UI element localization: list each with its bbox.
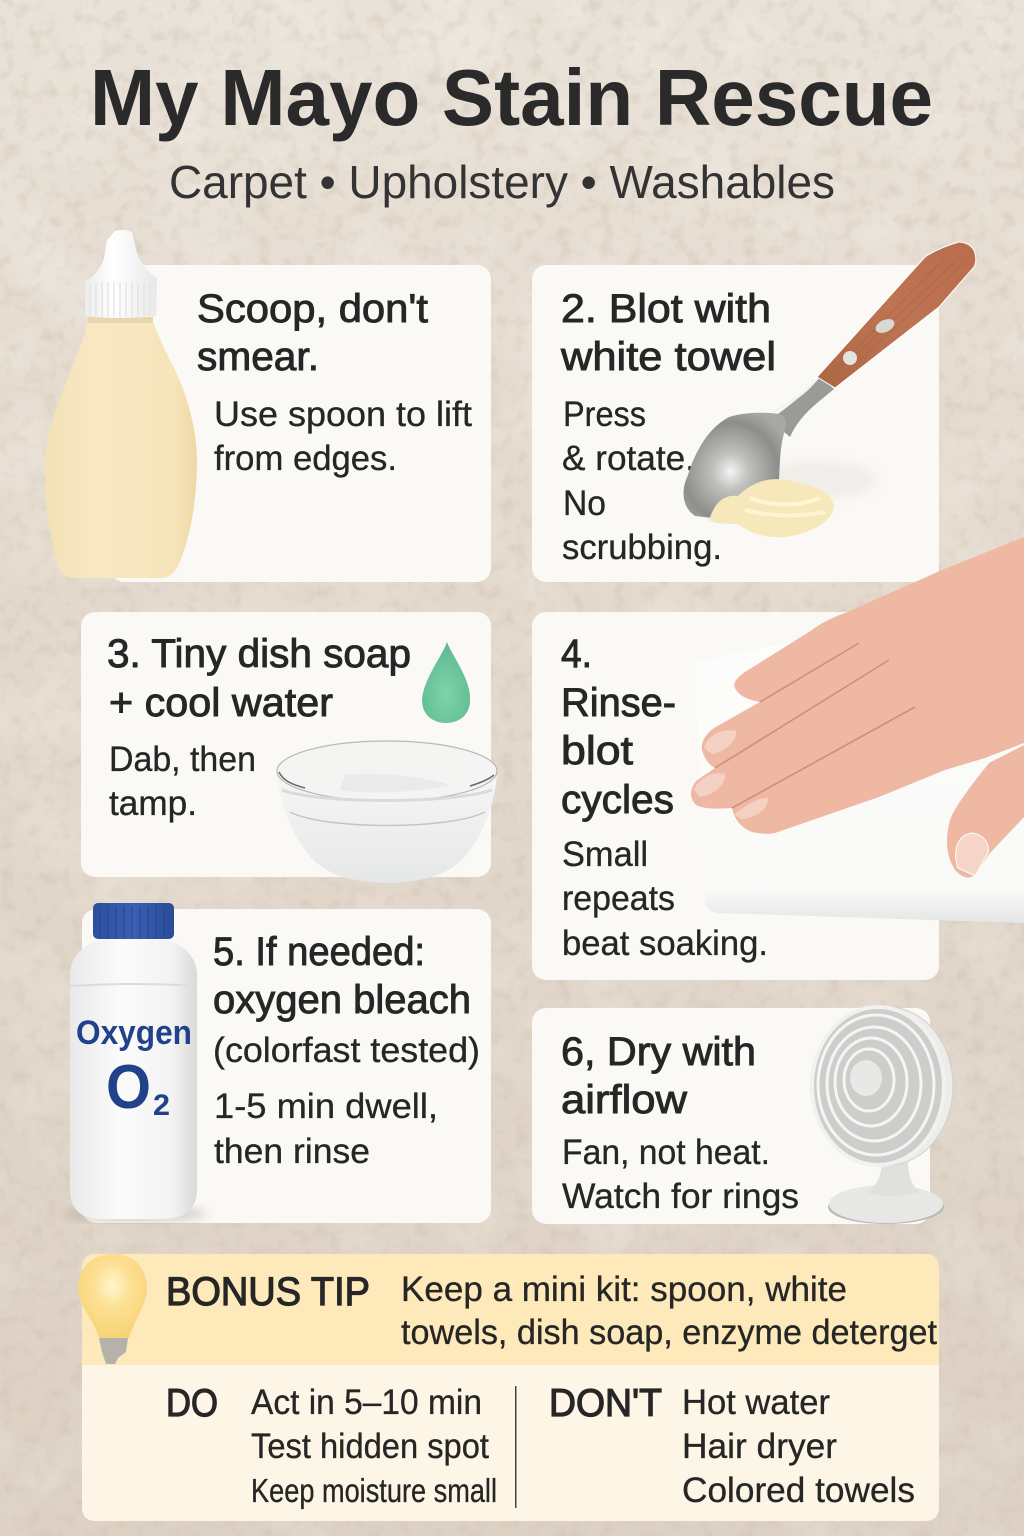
step 1 body: from edges.	[214, 439, 397, 478]
step 5 body: 1-5 min dwell,	[214, 1087, 438, 1126]
subtitle: Carpet • Upholstery • Washables	[169, 156, 835, 208]
step 1 heading	[197, 287, 428, 379]
oxygen label: Oxygen	[76, 1014, 192, 1052]
don't list: Hot water	[682, 1383, 830, 1422]
bonus tip text: towels, dish soap, enzyme deterget	[401, 1313, 937, 1352]
step 3 body: tamp.	[109, 784, 197, 823]
panel: step 2 blot	[532, 265, 939, 582]
O2 label: 2	[153, 1089, 170, 1122]
panel: bonus tip and do/don't	[82, 1254, 939, 1521]
step 4 body: repeats	[562, 879, 675, 918]
step 4 body	[562, 835, 768, 963]
bonus tip heading: BONUS TIP	[166, 1270, 370, 1314]
step 2 body: & rotate.	[562, 439, 695, 478]
step 5 body	[213, 1031, 480, 1171]
step 6 heading: airflow	[561, 1078, 687, 1122]
O2 label: O	[106, 1053, 151, 1122]
step 1 heading: Scoop, don't	[197, 287, 428, 331]
step 4 heading: blot	[561, 729, 633, 773]
step 6 body: Fan, not heat.	[562, 1133, 770, 1172]
don't heading: DON'T	[549, 1382, 662, 1425]
icon: oxygen bleach bottle	[63, 903, 207, 1220]
bonus tip text	[401, 1270, 937, 1352]
step 4 heading	[561, 632, 676, 822]
icon: spoon with mayo	[684, 242, 976, 537]
step 2 body: scrubbing.	[562, 528, 722, 567]
do and don't band	[82, 1365, 939, 1521]
step 3 heading: + cool water	[109, 681, 333, 725]
don't list: Colored towels	[682, 1471, 915, 1510]
do list: Act in 5–10 min	[251, 1383, 482, 1422]
don't list: Hair dryer	[682, 1427, 837, 1466]
step 4 heading: 4.	[561, 632, 592, 676]
step 6 body	[562, 1133, 799, 1216]
bonus tip band	[82, 1254, 939, 1365]
step 5 heading	[213, 930, 471, 1022]
step 2 heading: white towel	[560, 335, 776, 379]
panel: step 4 rinse	[532, 612, 939, 980]
step 2 heading: 2. Blot with	[561, 287, 771, 331]
step 1 body: Use spoon to lift	[214, 395, 472, 434]
step 3 heading	[107, 632, 411, 725]
step 2 body: Press	[563, 395, 646, 434]
don't list	[682, 1383, 915, 1510]
step 4 body: Small	[562, 835, 648, 874]
panel: step 6 airflow	[532, 1008, 930, 1224]
step 4 heading: cycles	[561, 778, 674, 822]
step 2 body	[562, 395, 722, 567]
icon: hand pressing towel	[691, 537, 1024, 878]
panel: step 1 scoop	[110, 265, 491, 582]
do list: Test hidden spot	[251, 1427, 489, 1466]
step 2 body: No	[563, 484, 606, 523]
step 5 heading: 5. If needed:	[213, 930, 425, 974]
step 3 body	[109, 740, 256, 823]
step 3 heading: 3. Tiny dish soap	[107, 632, 411, 676]
icon: white towel	[695, 640, 1024, 923]
step 3 body: Dab, then	[109, 740, 256, 779]
step 5 heading: oxygen bleach	[213, 978, 471, 1022]
icon: mayo squeeze bottle	[45, 230, 197, 578]
icon: white desk fan	[812, 1007, 953, 1224]
do list: Keep moisture small	[251, 1472, 497, 1509]
icon: light bulb	[78, 1254, 147, 1364]
panel: step 5 oxygen bleach	[82, 909, 491, 1223]
step 6 body: Watch for rings	[562, 1177, 799, 1216]
do heading: DO	[166, 1382, 218, 1425]
step 6 heading	[561, 1030, 756, 1122]
step 4 heading: Rinse-	[561, 681, 676, 725]
step 1 body	[214, 395, 472, 478]
bonus tip text: Keep a mini kit: spoon, white	[401, 1270, 847, 1309]
icon: green soap drop	[422, 642, 470, 723]
step 2 heading	[560, 287, 776, 379]
icon: glass bowl	[277, 741, 497, 883]
step 1 heading: smear.	[197, 335, 319, 379]
panel: step 3 dish soap	[81, 612, 491, 877]
title: My Mayo Stain Rescue	[90, 53, 933, 142]
do list	[251, 1383, 497, 1509]
step 6 heading: 6, Dry with	[561, 1030, 756, 1074]
step 4 body: beat soaking.	[562, 924, 768, 963]
step 5 body: then rinse	[214, 1132, 370, 1171]
step 5 body: (colorfast tested)	[213, 1031, 480, 1070]
